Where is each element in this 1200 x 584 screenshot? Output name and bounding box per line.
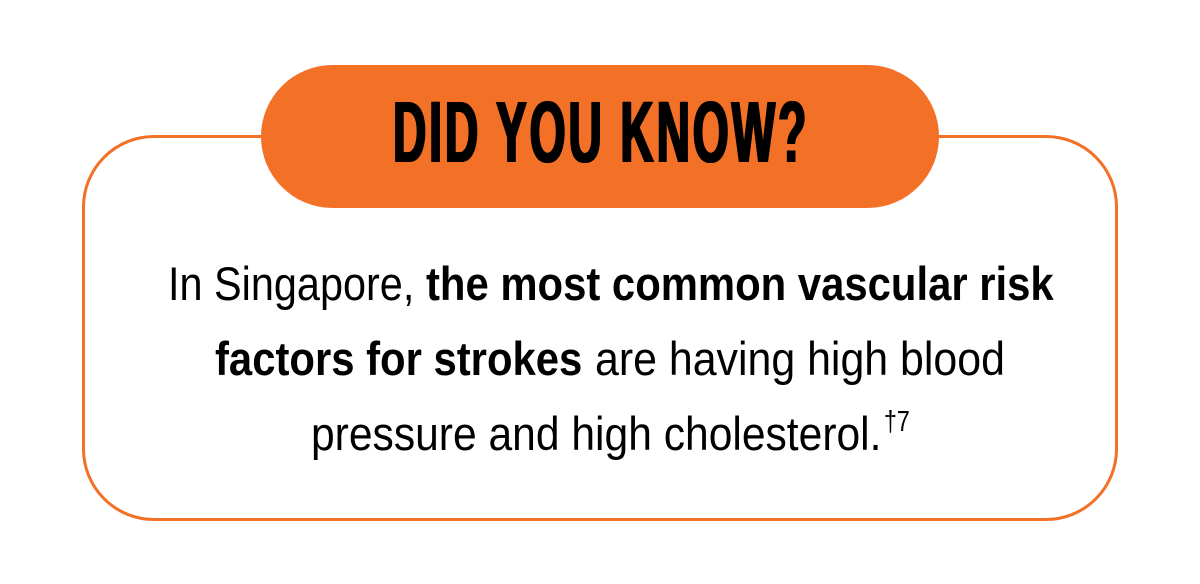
body text: pressure and high cholesterol. xyxy=(311,407,881,460)
body text xyxy=(168,257,1054,460)
body text: factors for strokes xyxy=(215,332,582,385)
heading text: DID YOU KNOW? xyxy=(393,84,809,181)
heading pill xyxy=(261,65,939,208)
body text: †7 xyxy=(884,406,910,438)
panel: rounded callout box xyxy=(82,135,1118,521)
body text: are having high blood xyxy=(595,332,1005,385)
body text: the most common vascular risk xyxy=(426,257,1054,310)
body text: In Singapore, xyxy=(168,257,414,310)
